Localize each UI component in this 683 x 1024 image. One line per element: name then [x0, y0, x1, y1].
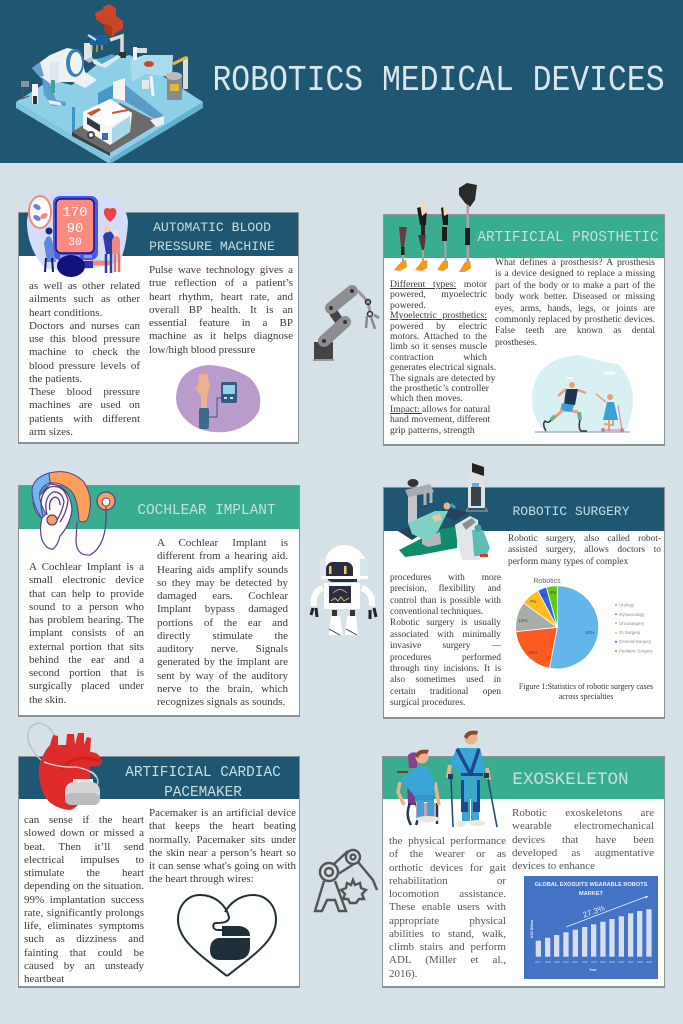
bar chart: global exosuits wearable robots market: 2027 — [628, 960, 634, 964]
pie chart: robotic surgery by specialty: Robotics — [533, 578, 561, 585]
text: left column: invasive surgery — — [390, 641, 501, 651]
panel header — [384, 215, 664, 258]
text: left column: electrical impulses to — [24, 854, 144, 866]
text: left column: procedures performed — [390, 653, 501, 663]
text: right column: devices that have been — [512, 834, 654, 846]
heading — [125, 765, 281, 801]
text: right column: the skin near a person’s heart so — [149, 847, 296, 859]
text: right column: devices to enhance — [512, 860, 595, 872]
panel header — [19, 486, 299, 529]
text: left column: patients with different — [29, 413, 140, 425]
bar chart: global exosuits wearable robots market: 2021 — [572, 960, 578, 964]
text: left column — [390, 573, 502, 708]
text: left column: These enable users with — [389, 901, 506, 913]
text: left column: as well as other related — [29, 280, 140, 292]
text: left column: generates electrical signals. — [390, 362, 496, 373]
pie chart: robotic surgery by specialty — [516, 578, 653, 668]
text: left column: 99% implantation success — [24, 894, 144, 906]
text: right column: A Cochlear Implant is — [157, 537, 288, 549]
heading: EXOSKELETON — [512, 770, 629, 790]
garage — [98, 85, 113, 105]
text: right column: nerve to the brain, which — [157, 683, 288, 695]
text: top right: perform many types of complex — [508, 557, 628, 567]
bar chart: global exosuits wearable robots market: 2018 — [545, 960, 551, 964]
text: left column: which then moves. — [390, 393, 463, 404]
text: left column: motors. Attached to the — [390, 331, 487, 342]
text: right column: different from a hearing aid. — [157, 550, 288, 562]
icon: medical robot arm outline — [313, 848, 378, 912]
heading: ARTIFICIAL CARDIAC — [125, 765, 281, 781]
icon: ear with cochlear implant — [32, 471, 116, 556]
text: right column: part of the body or to make a part of the — [495, 281, 655, 291]
text: right column: low/high blood pressure — [149, 344, 255, 356]
panel: artificial cardiac pacemaker — [18, 756, 300, 988]
text: right column: overall BP health. It is an — [149, 304, 293, 316]
bar chart: global exosuits wearable robots market: 2020 — [563, 960, 569, 964]
text: right column: prostheses. — [495, 338, 537, 348]
text: left column: of the wearer or as — [389, 848, 506, 860]
text: right column — [149, 807, 296, 885]
text: top right — [508, 534, 661, 567]
text: left column: fainting that could be — [24, 947, 144, 959]
text: left column: Doctors and nurses can — [29, 320, 140, 332]
bar chart: global exosuits wearable robots market: MARKET — [579, 891, 604, 897]
illustration: man in wheelchair and man in exoskeleton — [396, 730, 498, 828]
text: left column: the skin. — [29, 694, 66, 706]
text: top right: assisted surgery, allows doctors to — [508, 545, 661, 555]
panel header — [383, 757, 664, 799]
text: right column: auditory nerve. Signals — [157, 643, 288, 655]
text: left column — [24, 814, 144, 985]
bar chart: global exosuits wearable robots market: 2029 — [646, 960, 652, 964]
text: left column: caused by an unsteady — [24, 960, 144, 972]
bar chart: global exosuits wearable robots market: 2028 — [637, 960, 643, 964]
text: left column: rate, significantly prolongs — [24, 907, 144, 919]
text: left column: the prosthetic’s controller — [390, 383, 489, 394]
text: right column: normally. Pacemaker sits under — [149, 834, 296, 846]
icon: blood pressure monitor with people: 170 — [62, 205, 88, 221]
panel: exoskeleton — [382, 756, 665, 988]
text: left column: certain traditional open — [390, 687, 501, 697]
icon: robotic arm — [313, 285, 380, 361]
text: right column: Robotic exoskeletons are — [512, 807, 654, 819]
text: right column: directly stimulate the — [157, 630, 288, 642]
text: right column: damaged ears. Cochlear — [157, 590, 288, 602]
text: left column: These blood pressure — [29, 386, 140, 398]
panel: robotic surgery — [383, 487, 665, 719]
pie chart: robotic surgery by specialty: 12% — [518, 618, 528, 623]
legend: Oncosurgery — [619, 621, 645, 626]
bar chart: global exosuits wearable robots market — [524, 876, 658, 979]
text: left column: surgically placed under — [29, 680, 144, 692]
header banner — [0, 0, 683, 163]
text: left column: the patients. — [29, 373, 82, 385]
bar chart: global exosuits wearable robots market: 2025 — [609, 960, 615, 964]
text: right column: Hearing aids amplify sounds — [157, 564, 288, 576]
text: right column: wearable electromechanical — [512, 820, 654, 832]
text: right column: developed as augmentative — [512, 847, 654, 859]
text: left column: abilities to stand, walk, — [389, 928, 506, 940]
caption: figure 1: across specialties — [559, 692, 613, 701]
text: top right: Robotic surgery, also called robot- — [508, 534, 661, 544]
text: left column: conventional techniques. — [390, 607, 483, 617]
text: right column: eyes, arms, hands, legs, or joints are — [495, 304, 655, 314]
legend — [615, 602, 653, 654]
bar chart: global exosuits wearable robots market: GLOBAL EXOSUITS WEARABLE ROBOTS — [535, 882, 648, 888]
text: right column — [495, 258, 655, 348]
text: left column: sound to a person who — [29, 601, 144, 613]
text: right column: Implant bypass damaged — [157, 603, 288, 615]
text: left column: locomotion assistance. — [389, 888, 506, 900]
icon: robot character — [310, 545, 378, 636]
text: right column: Pulse wave technology gives a — [149, 264, 293, 276]
text: left column: blood pressure levels of — [29, 360, 140, 372]
text: left column: control than is possible with — [390, 596, 501, 606]
text: left column: the physical performance — [389, 835, 506, 847]
patient chair and staff — [42, 77, 66, 106]
legend: Gynaecology — [619, 612, 645, 617]
text: left column — [29, 561, 144, 706]
bar chart: global exosuits wearable robots market: 2019 — [554, 960, 560, 964]
text: left column: contraction which — [390, 352, 487, 363]
text: right column: recognizes signals as sounds. — [157, 696, 285, 708]
text: right column: generated by the implant are — [157, 656, 288, 668]
heading — [149, 220, 275, 254]
text: left column: can sense if the heart — [24, 814, 144, 826]
text: right column — [157, 537, 288, 708]
text: left column: slowed down or missed a — [24, 827, 144, 839]
text: left column: has problem hearing. The — [29, 614, 144, 626]
legend: General Surgery — [619, 639, 652, 644]
pie chart: robotic surgery by specialty: 5% — [541, 593, 547, 598]
text: left column: heart conditions. — [29, 307, 102, 319]
text: left column: powered by electric — [390, 321, 487, 332]
text: left column: external portion that sits — [29, 641, 144, 653]
text: left column: Impact: allows for natural — [390, 404, 490, 415]
text: right column — [149, 264, 293, 356]
text: left column: precision, flexibility and — [390, 584, 501, 594]
text: left column — [29, 280, 140, 438]
text: right column: true reflection of a patient’s — [149, 277, 293, 289]
text: left column: heartbeat — [24, 973, 64, 985]
surgical robot — [84, 43, 92, 60]
text: left column: ailments such as other — [29, 293, 140, 305]
text: right column: sent by way of the auditory — [157, 670, 288, 682]
text: left column: such as dizziness and — [24, 933, 144, 945]
icon: blood pressure monitor with people: 30 — [68, 237, 82, 249]
text: left column: life, eliminates symptoms — [24, 920, 144, 932]
text: left column: powered. — [390, 300, 426, 311]
pie chart: robotic surgery by specialty: 7% — [530, 599, 536, 604]
text: right column: heart rhythm, heart rate, and — [149, 291, 293, 303]
text: left column: beat. Then it’ll send — [24, 841, 144, 853]
legend: Urology — [619, 602, 635, 608]
text: right column: Pacemaker is an artificial device — [149, 807, 296, 819]
holographic screen — [130, 55, 173, 82]
bar chart: global exosuits wearable robots market: 2024 — [600, 960, 606, 964]
ambulance — [83, 99, 132, 145]
text: right column: portions of the ear and — [157, 617, 288, 629]
text: left column: use this blood pressure — [29, 333, 140, 345]
legend: GI Surgery — [619, 630, 641, 635]
heading: PRESSURE MACHINE — [149, 239, 275, 254]
text: left column: Myoelectric prosthetics: — [390, 310, 487, 321]
text: left column: through tiny incisions. It is — [390, 664, 501, 674]
text: left column: grip patterns, strength — [390, 425, 475, 436]
text: left column: A Cochlear Implant is a — [29, 561, 144, 573]
text: right column: machine as it helps diagnose — [149, 330, 293, 342]
text: left column: implant consists of an — [29, 627, 144, 639]
text: left column: orthotic devices for gait — [389, 862, 506, 874]
bar chart: global exosuits wearable robots market: USD Billion — [530, 920, 534, 938]
yellow robot arm and machine — [183, 57, 188, 89]
panel header — [19, 757, 299, 799]
panel header — [19, 213, 298, 256]
icon: blood pressure monitor with people — [26, 191, 128, 277]
panel header — [384, 488, 664, 531]
caption: figure 1: Figure 1:Statistics of robotic surgery cases — [519, 682, 653, 691]
bar chart: global exosuits wearable robots market: 2022 — [582, 960, 588, 964]
text: left column: stimulate the heart — [24, 867, 144, 879]
icon: prosthetic legs — [394, 183, 477, 272]
text: left column: climb stairs and perform — [389, 941, 506, 953]
icon: red heart with pacemaker — [27, 722, 102, 810]
panel: artificial prosthetic — [383, 214, 665, 446]
panel: automatic blood pressure machine — [18, 212, 299, 444]
illustration: runner with prosthetic legs and child on scooter — [532, 355, 633, 432]
text: left column: machine to check the — [29, 346, 140, 358]
text: left column: Robotic surgery is usually — [390, 618, 501, 628]
text: left column: 2016). — [389, 968, 417, 980]
text: left column: procedures with more — [390, 573, 501, 583]
text: right column: so they may be detected by — [157, 577, 288, 589]
text: left column: second portion that is — [29, 667, 144, 679]
panel: cochlear implant — [18, 485, 300, 717]
MRI — [32, 48, 97, 88]
text: right column: is a device designed to replace a missing — [495, 269, 655, 279]
text: left column: ADL (Miller et al., — [389, 954, 506, 966]
text: right column: False teeth are known as dental — [495, 326, 655, 336]
icon: isometric robotic hospital — [16, 4, 203, 164]
text: left column: depending on the situation. — [24, 880, 144, 892]
pie chart: robotic surgery by specialty: 22% — [528, 650, 538, 655]
text: left column: machines are used on — [29, 399, 140, 411]
text: right column: essential feature in a BP — [149, 317, 293, 329]
caption: figure 1 — [519, 682, 653, 701]
bar chart: global exosuits wearable robots market: 27.3% — [582, 903, 606, 920]
text: left column: arm sizes. — [29, 426, 73, 438]
icon: arm with cuff monitor — [176, 365, 260, 432]
text: right column: the heart through wires: — [149, 873, 254, 885]
bar chart: global exosuits wearable robots market: 2023 — [591, 960, 597, 964]
text: left column: surgical procedures. — [390, 698, 465, 708]
legend: Pediatric Surgery — [619, 648, 653, 654]
bar chart: global exosuits wearable robots market: 2026 — [618, 960, 624, 964]
text: left column: Different types: motor — [390, 279, 487, 290]
text: left column: behind the ear and a — [29, 654, 144, 666]
text: right column: that keeps the heart beating — [149, 820, 296, 832]
heading: PACEMAKER — [164, 785, 242, 801]
heading: ARTIFICIAL PROSTHETIC — [477, 230, 659, 246]
text: left column — [390, 279, 496, 436]
text: left column: The signals are detected by — [390, 373, 495, 384]
text: left column: small electronic device — [29, 574, 144, 586]
pie chart: robotic surgery by specialty: 4% — [550, 590, 556, 595]
text: right column: What defines a prosthesis? A prosthesis — [495, 258, 655, 268]
heading: COCHLEAR IMPLANT — [137, 503, 276, 519]
illustration: robotic surgery theatre — [398, 463, 490, 560]
bar chart: global exosuits wearable robots market: Year — [589, 968, 597, 972]
text: left column: rehabilitation or — [389, 875, 506, 887]
text: left column: associated with minimally — [390, 630, 501, 640]
pie chart: robotic surgery by specialty: 53% — [585, 630, 595, 635]
text: left column: appropriate physical — [389, 915, 506, 927]
text: right column: commonly replaced by prosthetic devices. — [495, 315, 655, 325]
icon: heart outline with pacemaker — [177, 894, 277, 977]
heading: AUTOMATIC BLOOD — [153, 220, 271, 235]
icon: blood pressure monitor with people: 90 — [67, 221, 83, 237]
title: ROBOTICS MEDICAL DEVICES — [212, 61, 665, 102]
text: right column: it can sense what's going on with — [149, 860, 296, 872]
text: left column: also sometimes used in — [390, 675, 501, 685]
red cross — [95, 4, 123, 37]
text: left column — [389, 835, 506, 980]
text: right column: body work better. Diseased or missing — [495, 292, 655, 302]
bar chart: global exosuits wearable robots market: 2017 — [535, 960, 541, 964]
text: left column: that can help to provide — [29, 588, 144, 600]
heading: ROBOTIC SURGERY — [512, 504, 630, 519]
text: left column: limb so it senses muscle — [390, 341, 487, 352]
text: right column — [512, 807, 654, 872]
text: left column: hand movement, different — [390, 414, 490, 425]
text: left column: powered, myoelectric — [390, 289, 487, 300]
